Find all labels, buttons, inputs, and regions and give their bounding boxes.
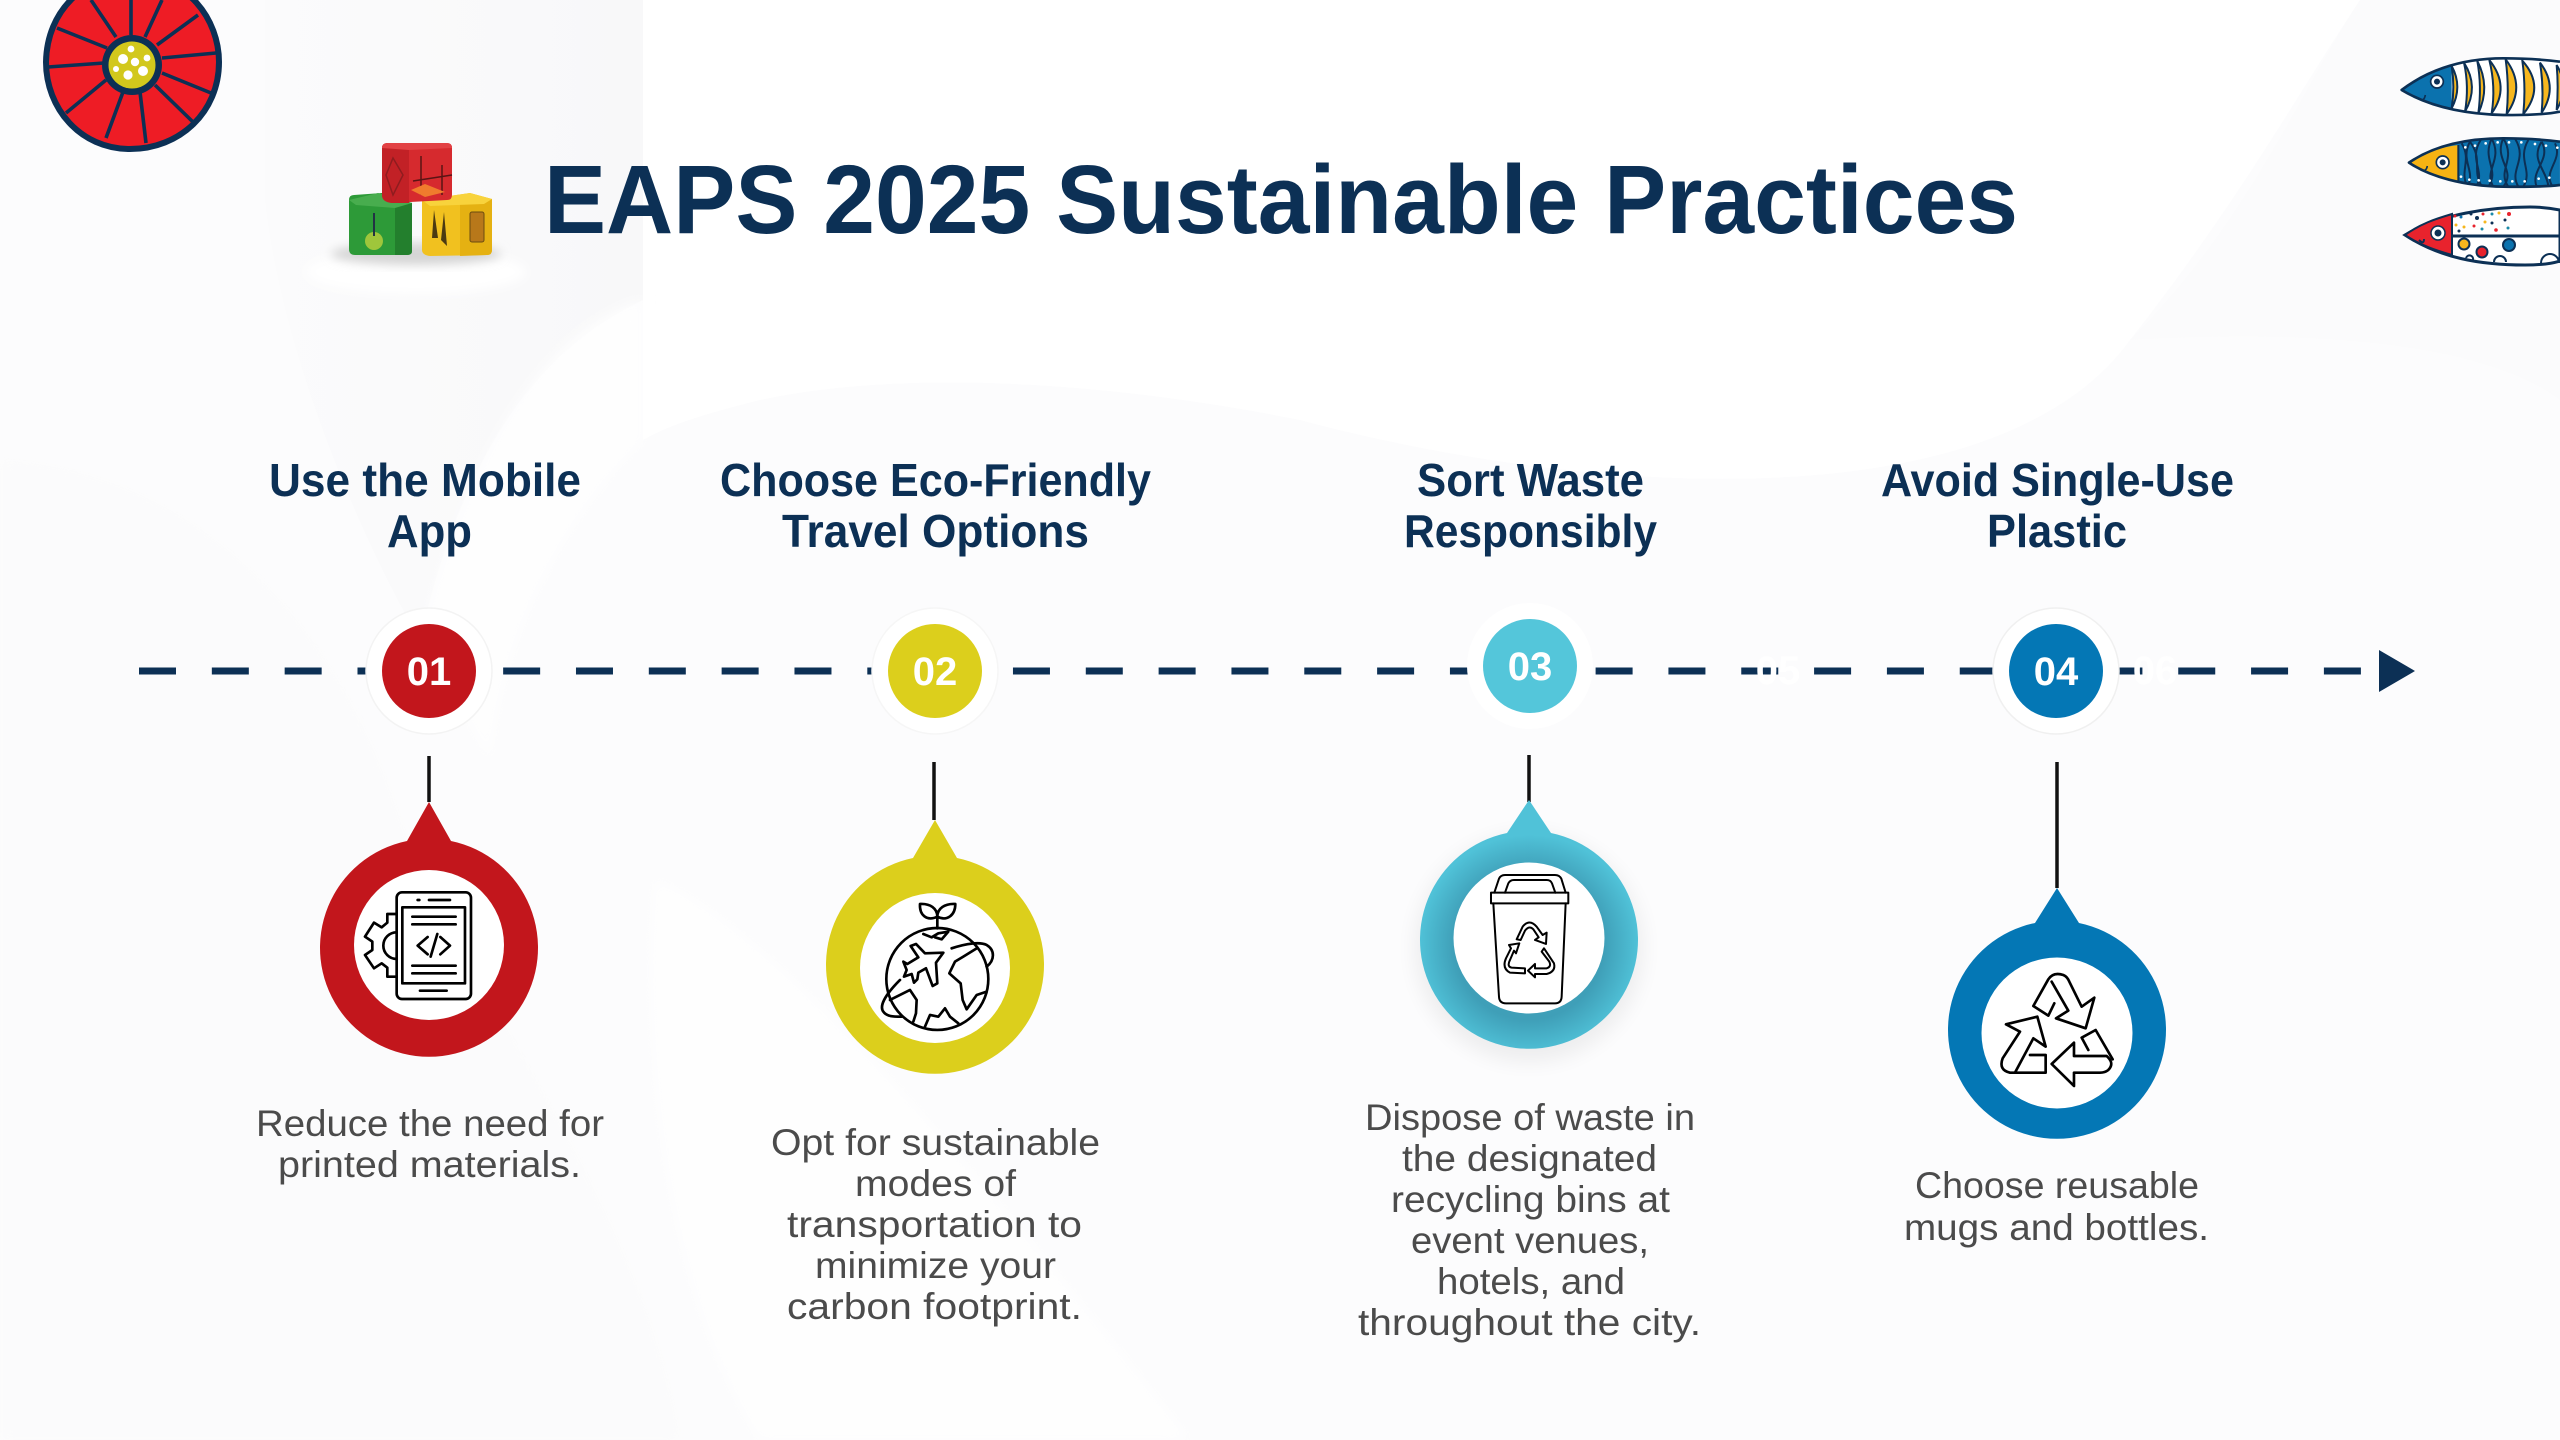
heading: choose eco-friendly travel options: Choose Eco-Friendly xyxy=(720,454,1151,506)
pin 2 with globe icon xyxy=(826,762,1044,1074)
title: EAPS 2025 Sustainable Practices xyxy=(544,145,2018,254)
sardine 1 xyxy=(2400,57,2560,116)
heading: sort waste responsibly: Responsibly xyxy=(1404,505,1657,557)
step 01 marker xyxy=(366,608,492,734)
heading: choose eco-friendly travel options: Travel Options xyxy=(782,505,1089,557)
step 03 marker xyxy=(1467,603,1593,729)
icon: sardines xyxy=(2393,53,2560,265)
timeline: dashed arrow xyxy=(139,649,2415,693)
step 01 marker: 01 xyxy=(407,650,451,694)
text: step 2 description: minimize your xyxy=(815,1245,1056,1286)
text: step 3 description: Dispose of waste in xyxy=(1365,1097,1695,1138)
icon: globe with plane and sprout xyxy=(882,904,993,1030)
heading: avoid single-use plastic xyxy=(1881,454,2234,557)
text: step 1 description xyxy=(256,1103,604,1185)
text: step 2 description: modes of xyxy=(855,1163,1017,1204)
text: step 2 description xyxy=(771,1122,1100,1327)
heading: use the mobile app xyxy=(269,454,581,557)
heading: avoid single-use plastic: Avoid Single-Use xyxy=(1881,454,2234,506)
text: step 3 description: throughout the city. xyxy=(1358,1302,1701,1343)
icon: recycling bin xyxy=(1491,875,1568,1003)
step 04 marker: 04 xyxy=(2034,650,2079,694)
text: step 1 description: Reduce the need for xyxy=(256,1103,604,1144)
sardine 2 xyxy=(2408,137,2560,188)
text: step 3 description xyxy=(1358,1097,1701,1343)
text: step 4 description xyxy=(1904,1165,2209,1248)
icon: recycle arrows xyxy=(2001,974,2113,1086)
timeline: dashed arrow: 05 xyxy=(1756,649,1800,693)
step 04 marker xyxy=(1993,608,2119,734)
text: step 3 description: the designated xyxy=(1402,1138,1657,1179)
text: step 4 description: Choose reusable xyxy=(1915,1165,2199,1206)
heading: sort waste responsibly: Sort Waste xyxy=(1417,454,1644,506)
pin 4 with recycle icon xyxy=(1948,762,2166,1139)
text: step 3 description: event venues, xyxy=(1411,1220,1649,1261)
icon: three toy cubes xyxy=(306,143,526,294)
pin 1 with mobile app icon xyxy=(320,756,538,1057)
text: step 1 description: printed materials. xyxy=(278,1144,581,1185)
text: step 3 description: hotels, and xyxy=(1437,1261,1625,1302)
logo: red wheel xyxy=(46,0,219,149)
step 02 marker xyxy=(872,608,998,734)
sardine 3 xyxy=(2405,207,2560,265)
text: step 2 description: Opt for sustainable xyxy=(771,1122,1100,1163)
icon: phone with gear xyxy=(365,892,471,999)
step 02 marker: 02 xyxy=(913,650,957,694)
heading: avoid single-use plastic: Plastic xyxy=(1987,505,2127,557)
pin 3 with recycling bin icon xyxy=(1415,755,1643,1062)
text: step 4 description: mugs and bottles. xyxy=(1904,1207,2209,1248)
timeline: dashed arrow: 06 xyxy=(2133,649,2177,693)
heading: use the mobile app: Use the Mobile xyxy=(269,454,581,506)
heading: use the mobile app: App xyxy=(387,505,472,557)
step 03 marker: 03 xyxy=(1508,645,1552,689)
heading: sort waste responsibly xyxy=(1404,454,1657,557)
heading: choose eco-friendly travel options xyxy=(720,454,1151,557)
text: step 2 description: carbon footprint. xyxy=(787,1286,1082,1327)
text: step 3 description: recycling bins at xyxy=(1391,1179,1671,1220)
text: step 2 description: transportation to xyxy=(787,1204,1082,1245)
